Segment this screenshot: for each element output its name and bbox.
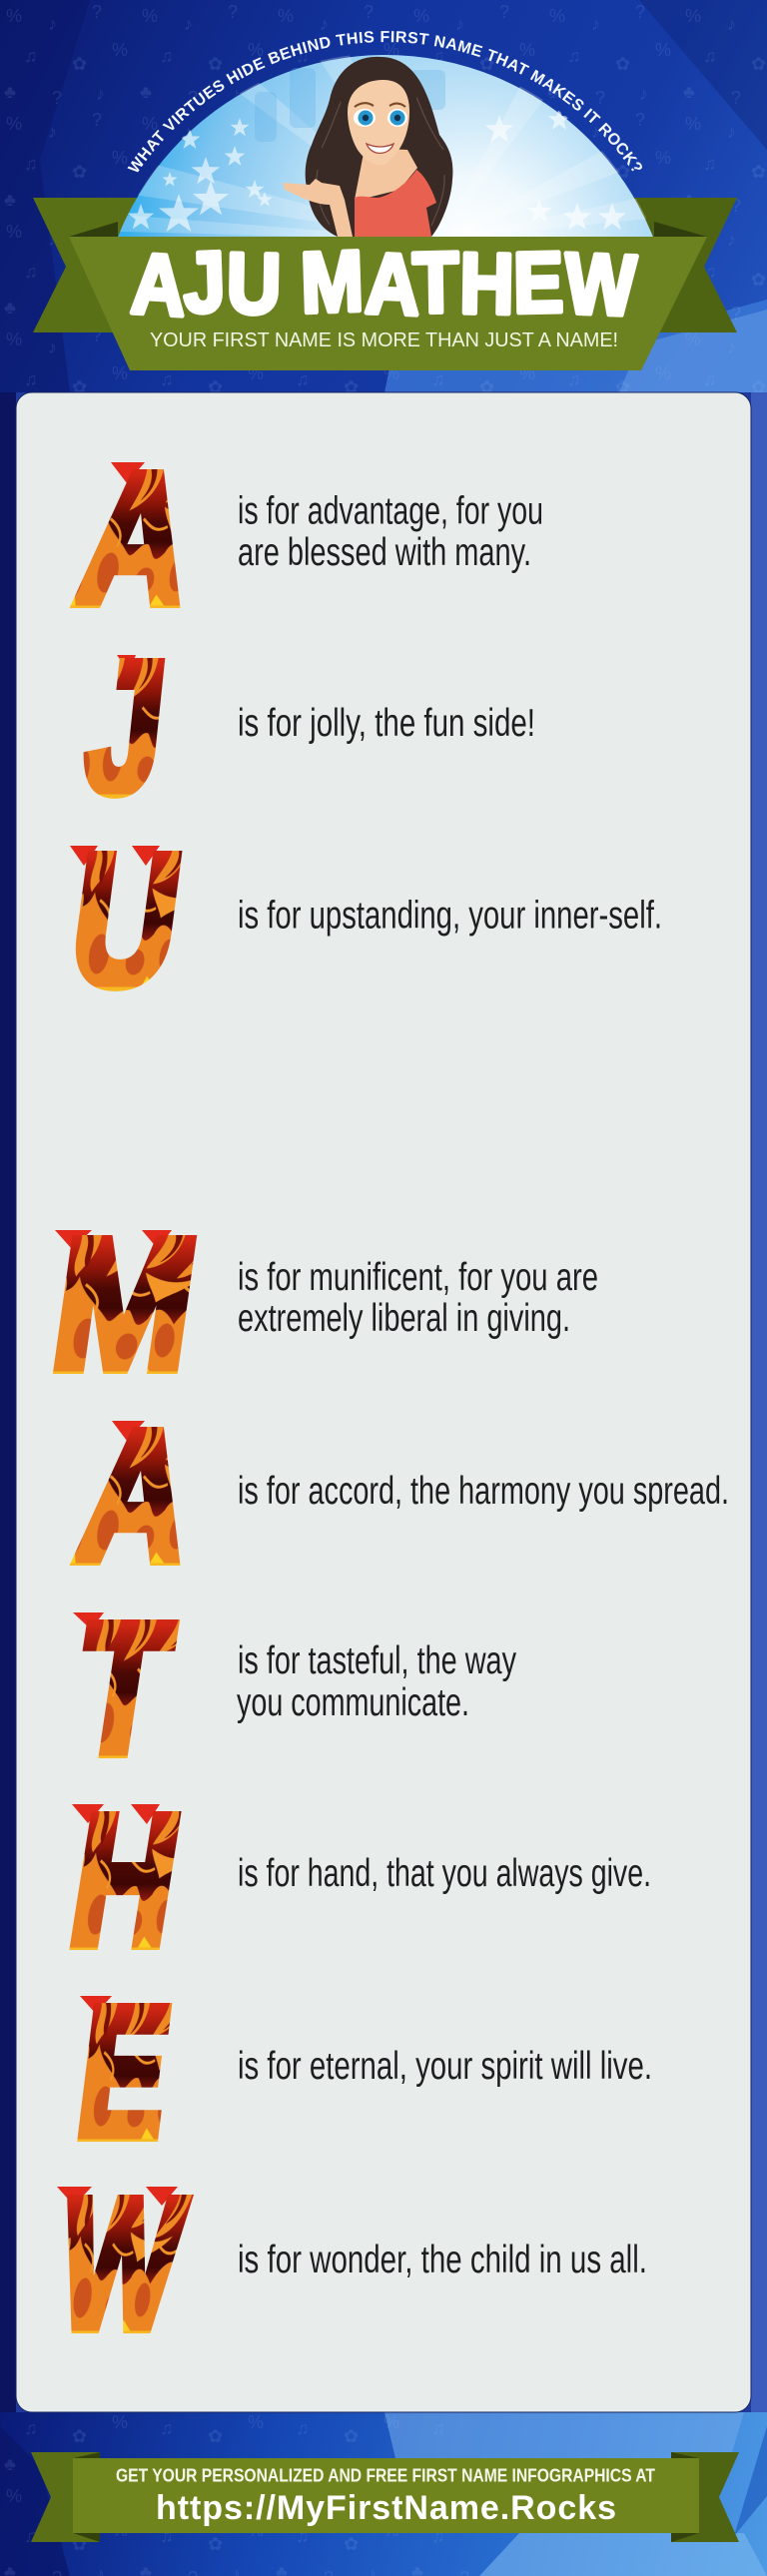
flame letter J: J bbox=[78, 625, 174, 832]
flame letter H: H bbox=[59, 1777, 192, 1985]
letter row M bbox=[42, 1201, 598, 1409]
flame letter A: A bbox=[66, 1392, 207, 1600]
text M: is for munificent, for you are bbox=[238, 1256, 598, 1299]
flame letter T: T bbox=[64, 1587, 182, 1793]
character: woman presenting bbox=[283, 57, 452, 237]
footer ribbon tails bbox=[31, 2452, 739, 2542]
text A: are blessed with many. bbox=[238, 531, 531, 574]
curved tagline: WHAT VIRTUES HIDE BEHIND THIS FIRST NAME THAT MAKES IT ROCK? bbox=[128, 31, 642, 172]
header ribbon folds bbox=[69, 222, 707, 237]
header ribbon bbox=[69, 237, 707, 370]
text W: is for wonder, the child in us all. bbox=[238, 2239, 647, 2281]
letter row A (second) bbox=[66, 1392, 729, 1600]
text T bbox=[237, 1639, 516, 1724]
flame letter W: W bbox=[47, 2160, 195, 2367]
footer call to action: GET YOUR PERSONALIZED AND FREE FIRST NAME INFOGRAPHICS AT bbox=[116, 2466, 655, 2486]
panel: letters bbox=[16, 392, 751, 2412]
letter row E bbox=[68, 1969, 652, 2177]
text J: is for jolly, the fun side! bbox=[238, 702, 535, 745]
text A: is for advantage, for you bbox=[238, 489, 543, 533]
text M bbox=[238, 1256, 598, 1340]
text A bbox=[238, 489, 543, 574]
flame letter A: A bbox=[66, 434, 207, 642]
text T: is for tasteful, the way bbox=[238, 1639, 516, 1682]
text T: you communicate. bbox=[237, 1681, 469, 1724]
letter row A bbox=[66, 434, 543, 642]
footer ribbon bbox=[73, 2458, 699, 2533]
flame letter U: U bbox=[61, 817, 191, 1024]
text M: extremely liberal in giving. bbox=[238, 1297, 570, 1340]
letter row T bbox=[64, 1587, 516, 1793]
letter row W bbox=[47, 2160, 647, 2367]
sunburst dome with stars bbox=[118, 55, 653, 237]
flame letter E: E bbox=[68, 1969, 180, 2177]
title: AJU MATHEW bbox=[129, 234, 638, 334]
letter row J bbox=[78, 625, 535, 832]
footer url: https://MyFirstName.Rocks bbox=[156, 2489, 616, 2527]
letter row U bbox=[61, 817, 662, 1024]
flame letter M: M bbox=[42, 1201, 208, 1409]
subtitle: YOUR FIRST NAME IS MORE THAN JUST A NAME! bbox=[150, 328, 618, 351]
header ribbon tails bbox=[33, 198, 737, 332]
letter row H bbox=[59, 1777, 651, 1985]
